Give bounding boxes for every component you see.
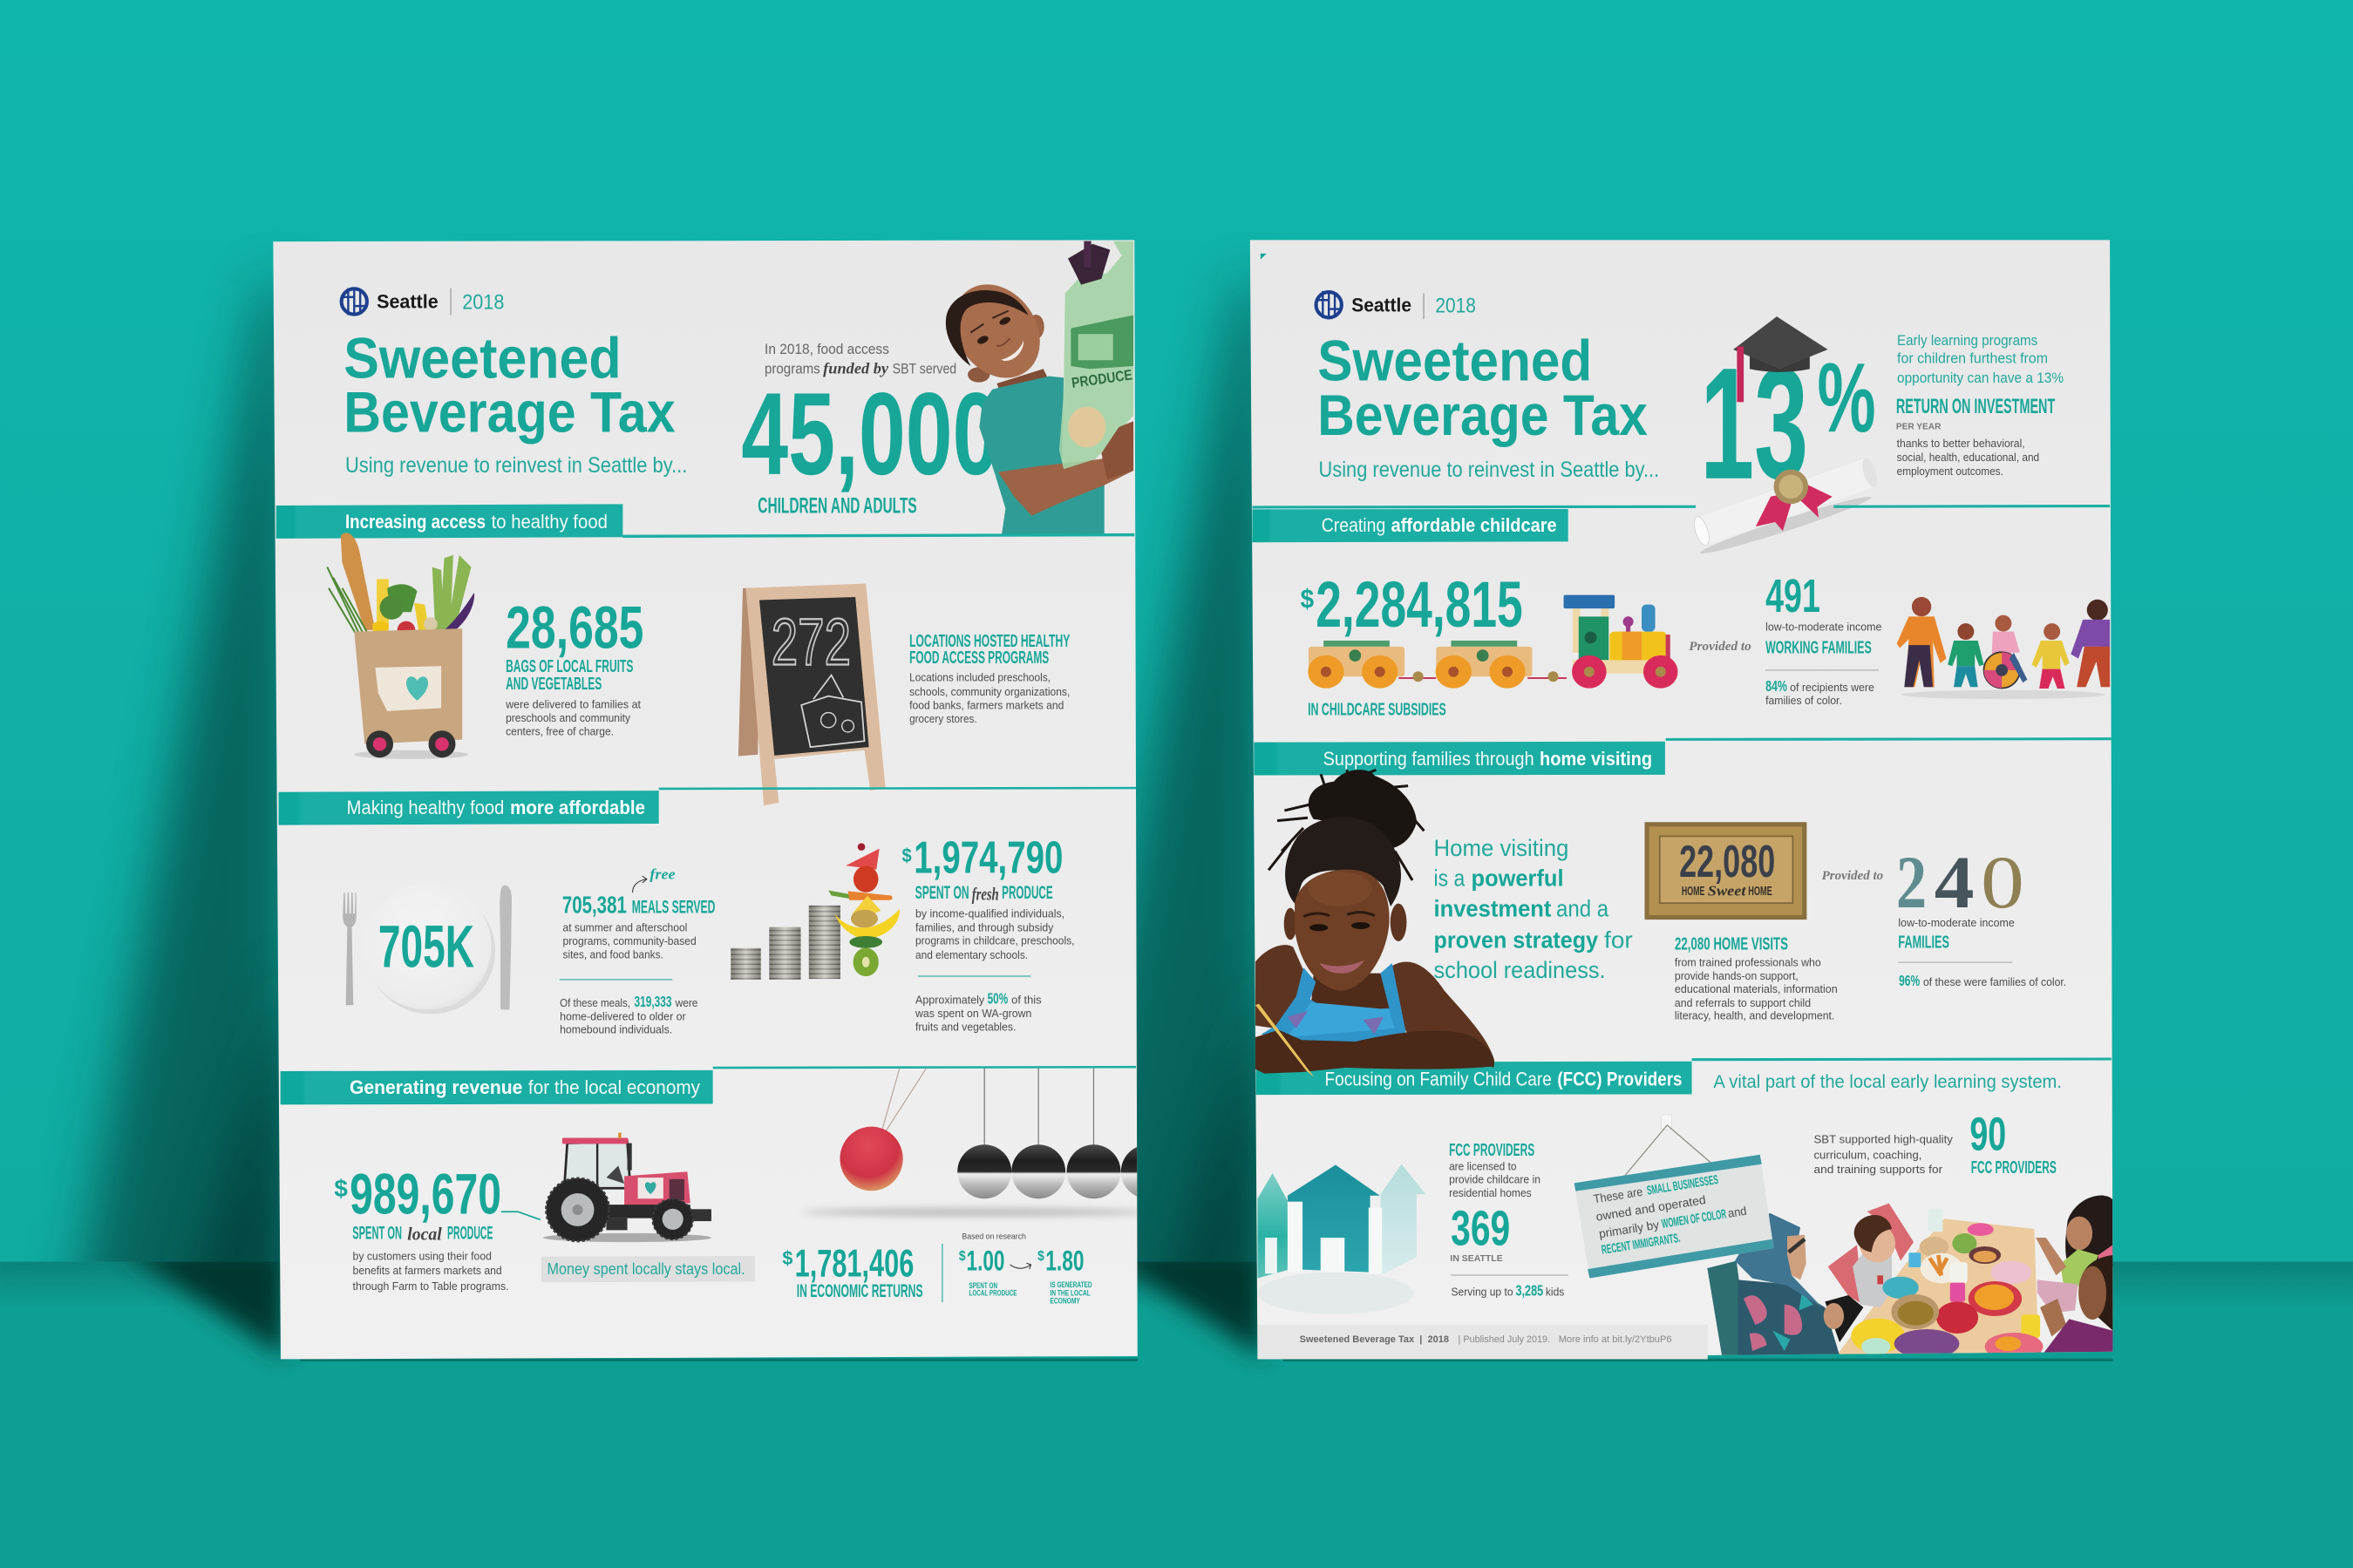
stat: 705,381 meals: programs, community-based — [563, 934, 697, 947]
stat: 705,381 meals: were — [675, 996, 697, 1009]
section bar: Generating revenue for the local economy: Generating revenue — [350, 1076, 522, 1098]
stat: 705,381 meals: MEALS SERVED — [632, 897, 715, 918]
stat: provided to 240 families: low-to-moderate income — [1898, 916, 2015, 929]
stat: 705,381 meals: homebound individuals. — [560, 1022, 672, 1035]
text: locations hosted: grocery stores. — [909, 712, 977, 725]
illustration: paper doll families — [1897, 597, 2110, 699]
intro stat: 45,000 children and adults: 45,000 — [741, 369, 999, 499]
illustration: stacked fruit — [828, 843, 900, 976]
icon: heart on Washington map — [406, 676, 428, 701]
photo: smiling girl with braids — [1255, 770, 1494, 1077]
stat: $989,670 local produce: benefits at farmers markets and — [353, 1264, 502, 1277]
stat: $1.00 becomes $1.80: 1.80 — [1045, 1244, 1084, 1276]
callout: Money spent locally stays local: Money spent locally stays local. — [547, 1260, 745, 1278]
stat: 90 FCC providers supported: 90 — [1969, 1109, 2006, 1160]
stat: $989,670 local produce: local — [407, 1225, 442, 1245]
text: locations hosted: FOOD ACCESS PROGRAMS — [909, 648, 1049, 668]
footer: publication note: Sweetened Beverage Tax | 2018 — [1300, 1334, 1449, 1345]
stat: $1,974,790 fresh produce: by income-qualified individuals, — [915, 907, 1064, 920]
stat: $1,974,790 fresh produce: was spent on WA-grown — [915, 1007, 1031, 1020]
footer: publication note — [1300, 1334, 1671, 1345]
text: home visiting statement: for — [1604, 927, 1633, 953]
stat: $1,781,406 economic returns: 1,781,406 — [795, 1242, 914, 1286]
stat: $1,781,406 economic returns: $ — [782, 1247, 793, 1269]
text: FCC providers 369: 3,285 — [1515, 1281, 1543, 1299]
title — [1317, 329, 1648, 447]
intro stat: 45,000 children and adults: SBT served — [893, 362, 956, 377]
illustration: chalkboard sign 272: 272 — [772, 605, 851, 679]
arrow: free note — [633, 876, 647, 893]
stat: $1.00 becomes $1.80: IN THE LOCAL — [1050, 1288, 1091, 1298]
stat: $1,974,790 fresh produce: 50% — [988, 989, 1008, 1007]
stat: $989,670 local produce: PRODUCE — [447, 1223, 493, 1244]
stat: 13% return on investment: thanks to better behavioral, — [1897, 437, 2025, 450]
illustration: doormat 22,080: 22,080 — [1679, 836, 1775, 886]
stat: $1.00 becomes $1.80: IS GENERATED — [1050, 1280, 1092, 1290]
subtitle: Using revenue to reinvest in Seattle by... — [1318, 458, 1659, 482]
stat: $1,974,790 fresh produce: $ — [902, 845, 912, 866]
footer band — [1257, 1325, 1708, 1359]
stat: 705,381 meals: free — [649, 866, 676, 883]
stat: $1,974,790 fresh produce: PRODUCE — [1002, 882, 1053, 903]
intro stat: 45,000 children and adults: funded by — [823, 360, 889, 377]
stat: $1.00 becomes $1.80: 1.00 — [967, 1244, 1004, 1276]
stat: $1,781,406 economic returns: IN ECONOMIC RETURNS — [797, 1280, 923, 1301]
illustration: paper cut-out houses — [1257, 1164, 1425, 1314]
stat: 28,685 bags: AND VEGETABLES — [506, 674, 602, 694]
stat: provided to 240 families: FAMILIES — [1898, 932, 1949, 952]
stat: $1.00 becomes $1.80: LOCAL PRODUCE — [969, 1288, 1017, 1298]
stat: 28,685 bags: were delivered to families at — [505, 697, 641, 710]
stat: $1,974,790 fresh produce — [902, 832, 1074, 1033]
section bar: Making healthy food more affordable: Making healthy food — [347, 797, 504, 818]
sign: small businesses note: These are — [1593, 1185, 1644, 1205]
section bar: Increasing access to healthy food — [276, 504, 1134, 539]
illustration: pink tractor — [543, 1133, 711, 1242]
text: provided to working families: WORKING FAMILIES — [1765, 638, 1872, 658]
footer: publication note: | Published July 2019. — [1459, 1334, 1550, 1345]
stat: $1,974,790 fresh produce: fresh — [972, 886, 999, 905]
stat: 13% return on investment: employment outcomes. — [1897, 465, 2003, 478]
text: FCC providers 369 — [1449, 1140, 1568, 1299]
stat: 13% return on investment: opportunity can have a 13% — [1897, 370, 2064, 386]
stat: 705,381 meals: at summer and afterschool — [563, 920, 687, 933]
poster shadows on wall and floor — [68, 285, 2113, 1361]
arrow: connector to tractor — [501, 1212, 541, 1219]
text: locations hosted: LOCATIONS HOSTED HEALTHY — [909, 631, 1070, 651]
stat: 28,685 bags: centers, free of charge. — [506, 724, 614, 737]
text: FCC providers 369: FCC PROVIDERS — [1449, 1140, 1534, 1160]
stat: $989,670 local produce: SPENT ON — [352, 1223, 402, 1244]
photo: family child care mealtime — [1707, 1196, 2112, 1361]
text: 22,080 home visits: and referrals to support child — [1675, 996, 1811, 1009]
poster: left, access to healthy food — [273, 240, 1175, 1359]
stat: $2,284,815 childcare subsidies: $ — [1301, 583, 1314, 614]
sign: small businesses note: RECENT IMMIGRANTS. — [1601, 1232, 1682, 1258]
text: 22,080 home visits: from trained professionals who — [1675, 955, 1821, 968]
text: locations hosted — [909, 631, 1070, 725]
photo: boy holding a produce bag — [936, 241, 1133, 534]
stat: $1.00 becomes $1.80 — [959, 1232, 1092, 1307]
text: provided to working families: of recipients were — [1790, 681, 1874, 694]
stat: provided to 240 families: 0 — [1981, 840, 2024, 924]
intro stat: 45,000 children and adults: CHILDREN AND ADULTS — [758, 494, 917, 519]
title: Sweetened — [343, 327, 622, 390]
stat: $989,670 local produce: 989,670 — [350, 1162, 501, 1225]
text: home visiting statement: is a — [1434, 865, 1465, 892]
stat: provided to 240 families: of these were families of color. — [1923, 975, 2066, 988]
illustration: doormat 22,080: Sweet — [1708, 883, 1747, 899]
sign: small businesses note: and — [1727, 1205, 1747, 1220]
title: Beverage Tax — [1317, 384, 1648, 447]
text: home visiting statement — [1434, 835, 1633, 983]
callout: Money spent locally stays local — [541, 1256, 755, 1282]
text: locations hosted: schools, community organizations, — [909, 685, 1070, 698]
text: locations hosted: food banks, farmers markets and — [909, 698, 1064, 711]
text: home visiting statement: investment — [1434, 896, 1552, 922]
stat: 705,381 meals: home-delivered to older or — [560, 1009, 686, 1022]
sign: small businesses note — [1574, 1115, 1774, 1278]
section bar: Supporting families through home visiting — [1254, 737, 2112, 776]
illustration: plate with 705K — [343, 883, 512, 1015]
text: FCC providers 369: kids — [1546, 1285, 1564, 1298]
header: Seattle logo and year — [342, 288, 504, 315]
text: home visiting statement: school readiness. — [1434, 957, 1606, 983]
stat: $1,974,790 fresh produce: programs in childcare, preschools, — [915, 933, 1074, 947]
stat: 13% return on investment — [1700, 333, 2064, 512]
sign: small businesses note: primarily by — [1598, 1218, 1660, 1240]
text: provided to working families: low-to-moderate income — [1765, 621, 1881, 634]
section bar: Creating affordable childcare: Creating — [1322, 514, 1385, 536]
stat: 13% return on investment: for children furthest from — [1897, 351, 2048, 367]
stat: 705,381 meals: Of these meals, — [560, 996, 630, 1009]
stat: 13% return on investment: 13 — [1700, 335, 1808, 512]
stat: 90 FCC providers supported: and training supports for — [1813, 1163, 1943, 1176]
illustration: Newton's cradle with apple — [803, 1068, 1175, 1216]
subtitle: Using revenue to reinvest in Seattle by... — [345, 453, 687, 478]
intro stat: 45,000 children and adults: In 2018, food access — [765, 342, 889, 357]
stat: $1.00 becomes $1.80: $ — [1037, 1249, 1044, 1264]
section bar: Supporting families through home visiting: home visiting — [1540, 748, 1652, 770]
text: FCC providers 369: residential homes — [1449, 1186, 1532, 1199]
sign: small businesses note: WOMEN OF COLOR — [1661, 1207, 1728, 1232]
text: 22,080 home visits: educational materials, information — [1675, 982, 1838, 995]
stat: $1,974,790 fresh produce: and elementary schools. — [915, 948, 1028, 961]
stat: $1.00 becomes $1.80: $ — [959, 1249, 966, 1264]
text: home visiting statement: powerful — [1472, 865, 1564, 892]
stat: 90 FCC providers supported — [1813, 1109, 2057, 1178]
text: home visiting statement: Home visiting — [1434, 835, 1568, 861]
text: provided to working families: 491 — [1765, 571, 1820, 622]
stat: $1.00 becomes $1.80: Based on research — [962, 1232, 1026, 1242]
text: FCC providers 369: are licensed to — [1449, 1160, 1517, 1173]
stat: 90 FCC providers supported: curriculum, coaching, — [1813, 1148, 1921, 1161]
sign: small businesses note: SMALL BUSINESSES — [1646, 1173, 1719, 1198]
sign: small businesses note: owned and operated — [1595, 1193, 1707, 1224]
stat: $1,974,790 fresh produce: 1,974,790 — [914, 832, 1063, 883]
icon: fork — [343, 893, 357, 1005]
text: FCC providers 369: Serving up to — [1451, 1285, 1513, 1298]
illustration: diploma with seal and ribbon — [1691, 457, 1880, 559]
stat: $1,781,406 economic returns — [782, 1242, 943, 1302]
stat: 90 FCC providers supported: SBT supported high-quality — [1813, 1133, 1953, 1146]
illustration: doormat 22,080: HOME — [1748, 885, 1772, 899]
section bar: Creating affordable childcare — [1252, 505, 2110, 542]
stat: $989,670 local produce — [334, 1162, 509, 1293]
text: locations hosted: Locations included preschools, — [909, 670, 1051, 683]
header: Seattle logo and year: 2018 — [1435, 295, 1476, 318]
stat: provided to 240 families: 96% — [1899, 972, 1920, 989]
text: provided to working families: families of color. — [1765, 694, 1842, 707]
section bar: Focusing on Family Child Care Providers: Focusing on Family Child Care — [1325, 1069, 1552, 1090]
text: 22,080 home visits: literacy, health, and development. — [1675, 1009, 1834, 1022]
stat: $2,284,815 childcare subsidies: 2,284,815 — [1316, 568, 1523, 641]
illustration: grocery bag on wheels — [327, 533, 474, 759]
title: Beverage Tax — [343, 381, 676, 445]
stat: $1,974,790 fresh produce: families, and through subsidy — [915, 920, 1054, 933]
header: Seattle logo and year: Seattle — [377, 291, 439, 313]
section bar: Focusing on Family Child Care Providers: (FCC) Providers — [1557, 1069, 1683, 1090]
section bar: Supporting families through home visiting: Supporting families through — [1323, 748, 1534, 770]
header: Seattle logo and year: 2018 — [462, 291, 504, 315]
text: provided to working families: Provided to — [1689, 640, 1751, 654]
illustration: plate with 705K: 705K — [378, 913, 474, 980]
stat: 13% return on investment: PER YEAR — [1896, 422, 1942, 431]
stat: 13% return on investment: social, health, educational, and — [1897, 451, 2039, 464]
stat: 705,381 meals: sites, and food banks. — [563, 948, 663, 961]
title: Sweetened — [1317, 329, 1592, 393]
section bar: Generating revenue for the local economy — [281, 1066, 1136, 1104]
stat: $1,974,790 fresh produce: of this — [1011, 993, 1042, 1006]
stat: 13% return on investment: Early learning programs — [1897, 333, 2037, 349]
section bar: Making healthy food more affordable — [279, 787, 1136, 825]
stat: $1,974,790 fresh produce: Approximately — [915, 993, 985, 1006]
stat: provided to 240 families — [1822, 840, 2066, 989]
section bar: Making healthy food more affordable: more affordable — [510, 797, 645, 818]
stat: 705,381 meals: 319,333 — [634, 993, 671, 1010]
stat: $989,670 local produce: through Farm to Table programs. — [353, 1280, 509, 1293]
text: home visiting statement: and a — [1556, 896, 1608, 922]
text: FCC providers 369: provide childcare in — [1449, 1172, 1540, 1185]
illustration: doormat 22,080: HOME — [1682, 885, 1705, 899]
stat: 13% return on investment: RETURN ON INVESTMENT — [1896, 395, 2055, 418]
text: FCC providers 369: IN SEATTLE — [1450, 1254, 1503, 1264]
section bar: Generating revenue for the local economy: for the local economy — [528, 1076, 701, 1098]
stat: provided to 240 families: Provided to — [1822, 869, 1883, 883]
stat: $1,974,790 fresh produce: fruits and vegetables. — [915, 1020, 1016, 1033]
header: Seattle logo and year — [1316, 291, 1476, 319]
illustration: wooden toy train — [1308, 595, 1678, 689]
text: FCC providers 369: 369 — [1451, 1202, 1510, 1257]
stat: $2,284,815 childcare subsidies — [1301, 568, 1523, 719]
stat: $989,670 local produce: $ — [334, 1175, 348, 1202]
illustration: doormat 22,080 — [1645, 822, 1806, 920]
icon: knife — [500, 886, 512, 1009]
stat: 28,685 bags — [505, 594, 643, 737]
text: 22,080 home visits — [1675, 934, 1838, 1022]
poster: right, childcare and home visiting — [1250, 240, 2113, 1361]
text: provided to working families — [1689, 571, 1881, 707]
stat: 28,685 bags: 28,685 — [506, 594, 643, 662]
tagline: vital part of early learning system: A vital part of the local early learning system. — [1713, 1071, 2062, 1092]
stat: 13% return on investment: % — [1817, 343, 1876, 453]
stat: $1,974,790 fresh produce: SPENT ON — [915, 882, 969, 903]
stat: 705,381 meals: 705,381 — [562, 892, 627, 919]
stat: provided to 240 families: 2 — [1896, 840, 1927, 924]
stat: provided to 240 families: 4 — [1935, 840, 1974, 924]
illustration: coin stacks — [731, 906, 840, 980]
intro stat: 45,000 children and adults — [741, 342, 999, 519]
section bar: Increasing access to healthy food: Increasing access — [345, 511, 486, 533]
stat: 28,685 bags: preschools and community — [506, 711, 630, 724]
stat: 28,685 bags: BAGS OF LOCAL FRUITS — [506, 656, 633, 676]
stat: $989,670 local produce: by customers using their food — [353, 1249, 492, 1262]
stat: $1.00 becomes $1.80: SPENT ON — [969, 1281, 997, 1291]
text: home visiting statement: proven strategy — [1434, 927, 1598, 953]
section bar: Increasing access to healthy food: to healthy food — [492, 511, 608, 533]
stat: 705,381 meals — [560, 866, 715, 1035]
arrow: $1.00 to $1.80 — [1010, 1263, 1031, 1269]
text: 22,080 home visits: provide hands-on support, — [1675, 969, 1799, 982]
photo: boy holding a produce bag: PRODUCE — [1071, 366, 1133, 391]
header: Seattle logo and year: Seattle — [1351, 294, 1411, 316]
title — [343, 327, 676, 445]
illustration: chalkboard sign 272 — [738, 584, 886, 805]
stat: $1.00 becomes $1.80: ECONOMY — [1050, 1297, 1080, 1307]
footer: publication note: More info at bit.ly/2YtbuP6 — [1559, 1334, 1671, 1345]
section bar: Creating affordable childcare: affordable childcare — [1391, 514, 1557, 536]
stat: 90 FCC providers supported: FCC PROVIDERS — [1971, 1157, 2057, 1178]
stat: $2,284,815 childcare subsidies: IN CHILDCARE SUBSIDIES — [1308, 699, 1446, 719]
text: provided to working families: 84% — [1765, 677, 1787, 695]
intro stat: 45,000 children and adults: programs — [765, 362, 820, 377]
section bar: Focusing on Family Child Care Providers — [1256, 1057, 2112, 1095]
text: 22,080 home visits: 22,080 HOME VISITS — [1675, 934, 1788, 954]
illustration: graduation cap — [1733, 316, 1828, 402]
